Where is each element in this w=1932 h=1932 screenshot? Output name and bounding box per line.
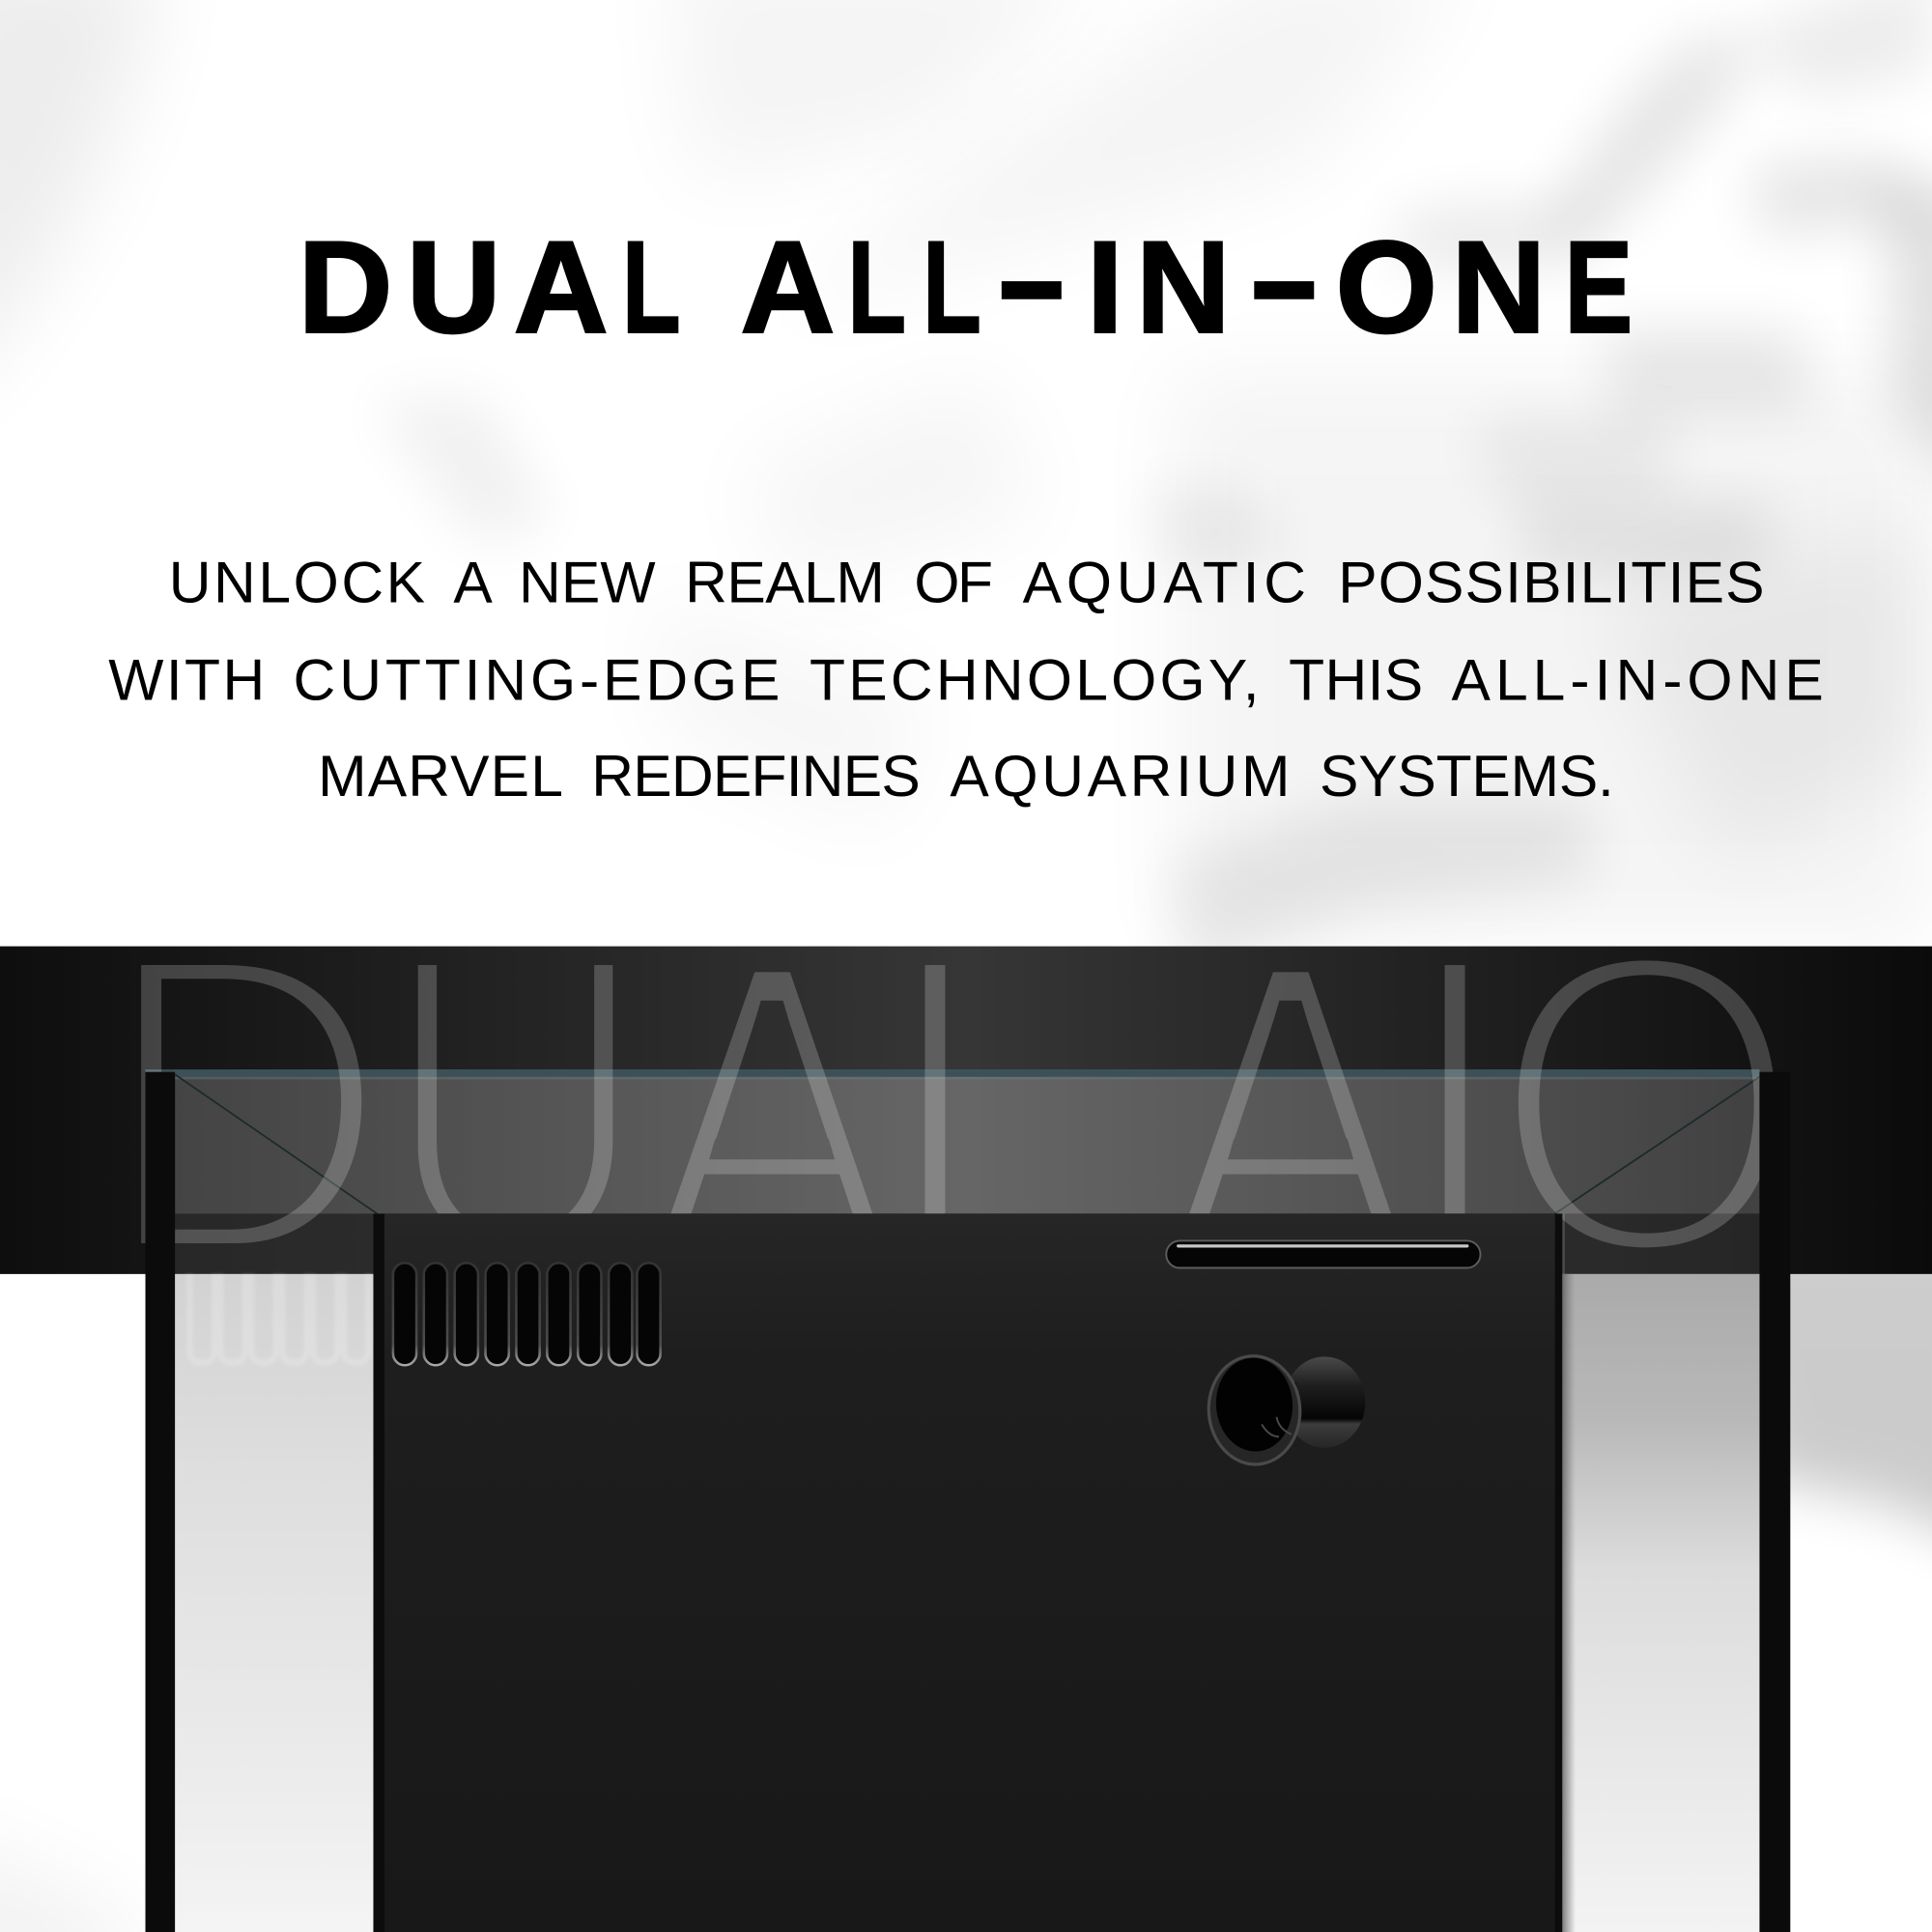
- description text: WITH: [108, 646, 265, 712]
- description text: TECHNOLOGY,: [810, 646, 1260, 712]
- title: IN: [1087, 214, 1231, 360]
- aquarium glass top: [146, 1069, 1759, 1274]
- return nozzle: [1206, 1353, 1365, 1467]
- right aquarium post: [1759, 1072, 1790, 1932]
- title: -: [1248, 206, 1321, 352]
- overflow slot: [1166, 1240, 1481, 1267]
- title: DUA: [298, 214, 609, 360]
- left white glass pane: [175, 1274, 373, 1932]
- title: -: [995, 206, 1068, 352]
- description text: UNLOCK: [169, 550, 425, 615]
- title: E: [1565, 213, 1633, 360]
- description text: OF: [914, 550, 993, 615]
- title: L: [622, 215, 680, 360]
- title: L: [923, 215, 981, 360]
- right glass pane: [1562, 1274, 1759, 1932]
- description text: CUTTING-EDGE: [294, 646, 780, 712]
- title: A: [741, 214, 835, 360]
- description text: POSSIBILITIES: [1338, 550, 1765, 615]
- description text: AQUARIUM: [950, 743, 1290, 809]
- title: L: [848, 215, 906, 360]
- description text: AQUATIC: [1023, 550, 1306, 615]
- description text: MARVEL: [318, 743, 563, 809]
- description text: THIS: [1289, 646, 1423, 712]
- title: ON: [1336, 214, 1546, 360]
- description text: ALL-IN-ONE: [1452, 646, 1824, 712]
- left aquarium post: [146, 1072, 175, 1932]
- description text: REDEFINES: [591, 743, 921, 809]
- rear panel: [373, 1213, 1562, 1932]
- ghost lettering DUAL AIO: [141, 960, 1774, 1248]
- description text: [108, 550, 1824, 809]
- description text: SYSTEMS.: [1320, 743, 1614, 809]
- title: [298, 206, 1633, 360]
- dark title band: [0, 947, 1932, 1274]
- description text: NEW: [519, 550, 656, 615]
- description text: REALM: [685, 550, 885, 615]
- description text: A: [453, 550, 493, 615]
- vent slots: [393, 1263, 661, 1365]
